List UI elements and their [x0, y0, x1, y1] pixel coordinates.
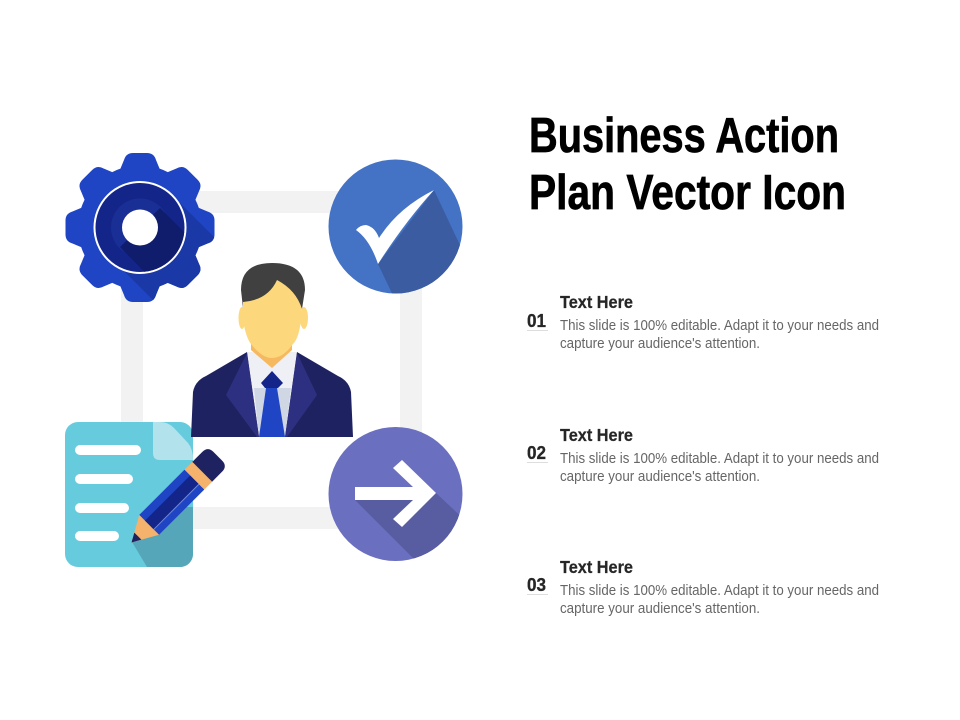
title: Plan Vector Icon: [529, 166, 846, 220]
list item 01: [527, 292, 879, 352]
list item 03: capture your audience's attention.: [560, 600, 760, 617]
title: [529, 109, 846, 220]
list item 02: This slide is 100% editable. Adapt it to your needs and: [560, 450, 879, 467]
list item 01: capture your audience's attention.: [560, 335, 760, 352]
list item 03: This slide is 100% editable. Adapt it to your needs and: [560, 582, 879, 599]
icon: document with pencil: [65, 422, 228, 567]
icon: gear: [66, 153, 214, 302]
title: Business Action: [529, 109, 839, 163]
list item 02: Text Here: [560, 425, 633, 445]
list item 01: Text Here: [560, 292, 633, 312]
icon: businessman: [191, 263, 353, 437]
icon: check mark circle: [328, 160, 462, 294]
background frame: [132, 202, 411, 518]
list item 02: [527, 425, 879, 485]
list item 02: 02: [527, 442, 546, 463]
list item 03: 03: [527, 574, 546, 595]
list item 02: capture your audience's attention.: [560, 468, 760, 485]
list item 01: 01: [527, 310, 546, 331]
list item 03: Text Here: [560, 557, 633, 577]
list item 01: This slide is 100% editable. Adapt it to your needs and: [560, 317, 879, 334]
list item 03: [527, 557, 879, 617]
icon: arrow circle: [328, 427, 470, 565]
